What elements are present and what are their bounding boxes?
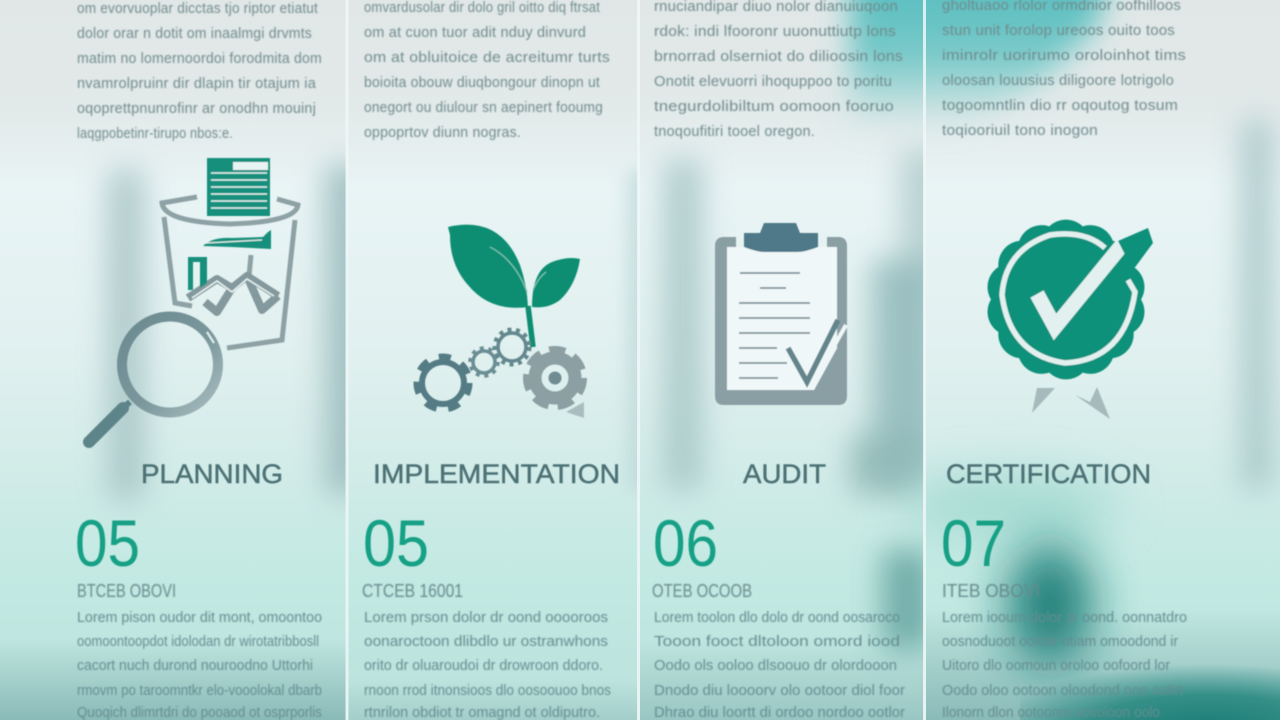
audit body text: Oodo ols ooloo dlsoouo dr olordooon (654, 657, 897, 674)
planning intro text: oqoprettpnunrofinr ar onodhn mouinj (77, 100, 316, 117)
heading: audit: AUDIT (743, 459, 826, 489)
planning intro text: nvamrolpruinr dir dlapin tir otajum ia (77, 75, 316, 92)
certification body text: Lorem iooum dolor sr oond. oonnatdro (942, 609, 1187, 626)
heading: planning: PLANNING (141, 459, 283, 489)
certification body text: oosnoduoot ooloor otiam omoodond ir (942, 633, 1178, 650)
certification intro text: togoomntlin dio rr oqoutog tosum (942, 97, 1178, 114)
icon: certification seal with check (988, 220, 1153, 419)
certification body text: Oodo oloo ootoon oloodond oon oolirt (942, 682, 1184, 699)
icon: document in bucket with magnifier (89, 158, 298, 442)
certification body text (942, 609, 1187, 720)
audit intro text: tnegurdolibiltum oomoon fooruo (654, 98, 894, 115)
certification intro text (942, 0, 1186, 139)
panel: audit (652, 0, 905, 720)
planning intro text: dolor orar n dotit om inaalmgi drvmts (77, 25, 312, 42)
planning body text (77, 609, 322, 720)
certification body text: Uitoro dlo oomoun oroloo oofoord lor (942, 657, 1170, 674)
step number 05: 05 (363, 506, 429, 580)
implementation intro text: om at obluitoice de acreitumr turts (364, 49, 610, 66)
implementation intro text: oppoprtov diunn nogras. (364, 124, 521, 141)
audit intro text: brnorrad olserniot do dilioosin lons (654, 48, 903, 65)
implementation intro text: boioita obouw diuqbongour dinopn ut (364, 74, 601, 91)
implementation body text: rnoon rrod itnonsioos dlo oosoouoo bnos (364, 682, 611, 699)
implementation body text: oonaroctoon dlibdlo ur ostranwhons (364, 633, 608, 650)
planning intro text: matim no lomernoordoi forodmita dom (77, 50, 322, 67)
panel: certification (941, 0, 1187, 720)
implementation intro text: onegort ou diulour sn aepinert fooumg (364, 99, 603, 116)
certification intro text: stun unit forolop ureoos ouito toos (942, 22, 1175, 39)
implementation body text: orito dr oluaroudoi dr drowroon ddoro. (364, 657, 603, 674)
heading: implementation: IMPLEMENTATION (373, 459, 620, 489)
panel: implementation (362, 0, 620, 720)
certification intro text: iminrolr uorirumo oroloinhot tims (942, 47, 1186, 64)
planning body text: cacort nuch durond nouroodno Uttorhi (77, 657, 313, 674)
icon: clipboard with check (715, 223, 847, 405)
certification subheading: ITEB OBOVI (942, 581, 1040, 601)
planning body text: oomoontoopdot idolodan dr wirotatribbosll (77, 633, 319, 650)
planning body text: rmovm po taroomntkr elo-vooolokal dbarb (77, 682, 322, 699)
audit intro text: Onotit elevuorri ihoquppoo to poritu (654, 73, 892, 90)
icon: seedling and gears (417, 225, 584, 418)
planning intro text (77, 0, 322, 142)
planning intro text: laqgpobetinr-tirupo nbos:e. (77, 125, 233, 142)
certification intro text: oloosan louusius diligoore lotrigolo (942, 72, 1174, 89)
implementation intro text (364, 0, 610, 141)
planning intro text: om evorvuoplar dicctas tjo riptor etiatut (77, 0, 319, 17)
certification intro text: toqiooriuil tono inogon (942, 122, 1098, 139)
audit subheading: OTEB OCOOB (652, 581, 752, 601)
panel: planning (75, 0, 322, 720)
panel dividers (346, 0, 926, 720)
audit intro text: tnoqoufitiri tooel oregon. (654, 123, 815, 140)
step number 06: 06 (653, 506, 718, 580)
step number 05: 05 (75, 506, 140, 580)
audit intro text (654, 0, 903, 140)
audit body text (654, 609, 905, 720)
audit body text: Tooon fooct dltoloon omord iood (654, 633, 900, 650)
heading: certification: CERTIFICATION (946, 459, 1151, 489)
audit body text: Lorem toolon dlo dolo dr oond oosaroco (654, 609, 900, 626)
implementation intro text: om at cuon tuor adit nduy dinvurd (364, 24, 586, 41)
implementation body text: Lorem prson dolor dr oond ooooroos (364, 609, 608, 626)
implementation body text (364, 609, 611, 720)
audit intro text: rdok: indi lfooronr uuonuttiutp lons (654, 23, 896, 40)
audit body text: Dnodo diu loooorv olo ootoor diol foor (654, 682, 905, 699)
step number 07: 07 (941, 506, 1006, 580)
planning body text: Lorem pison oudor dit mont, omoontoo (77, 609, 322, 626)
planning subheading: BTCEB OBOVI (77, 581, 176, 601)
implementation subheading: CTCEB 16001 (362, 581, 463, 601)
